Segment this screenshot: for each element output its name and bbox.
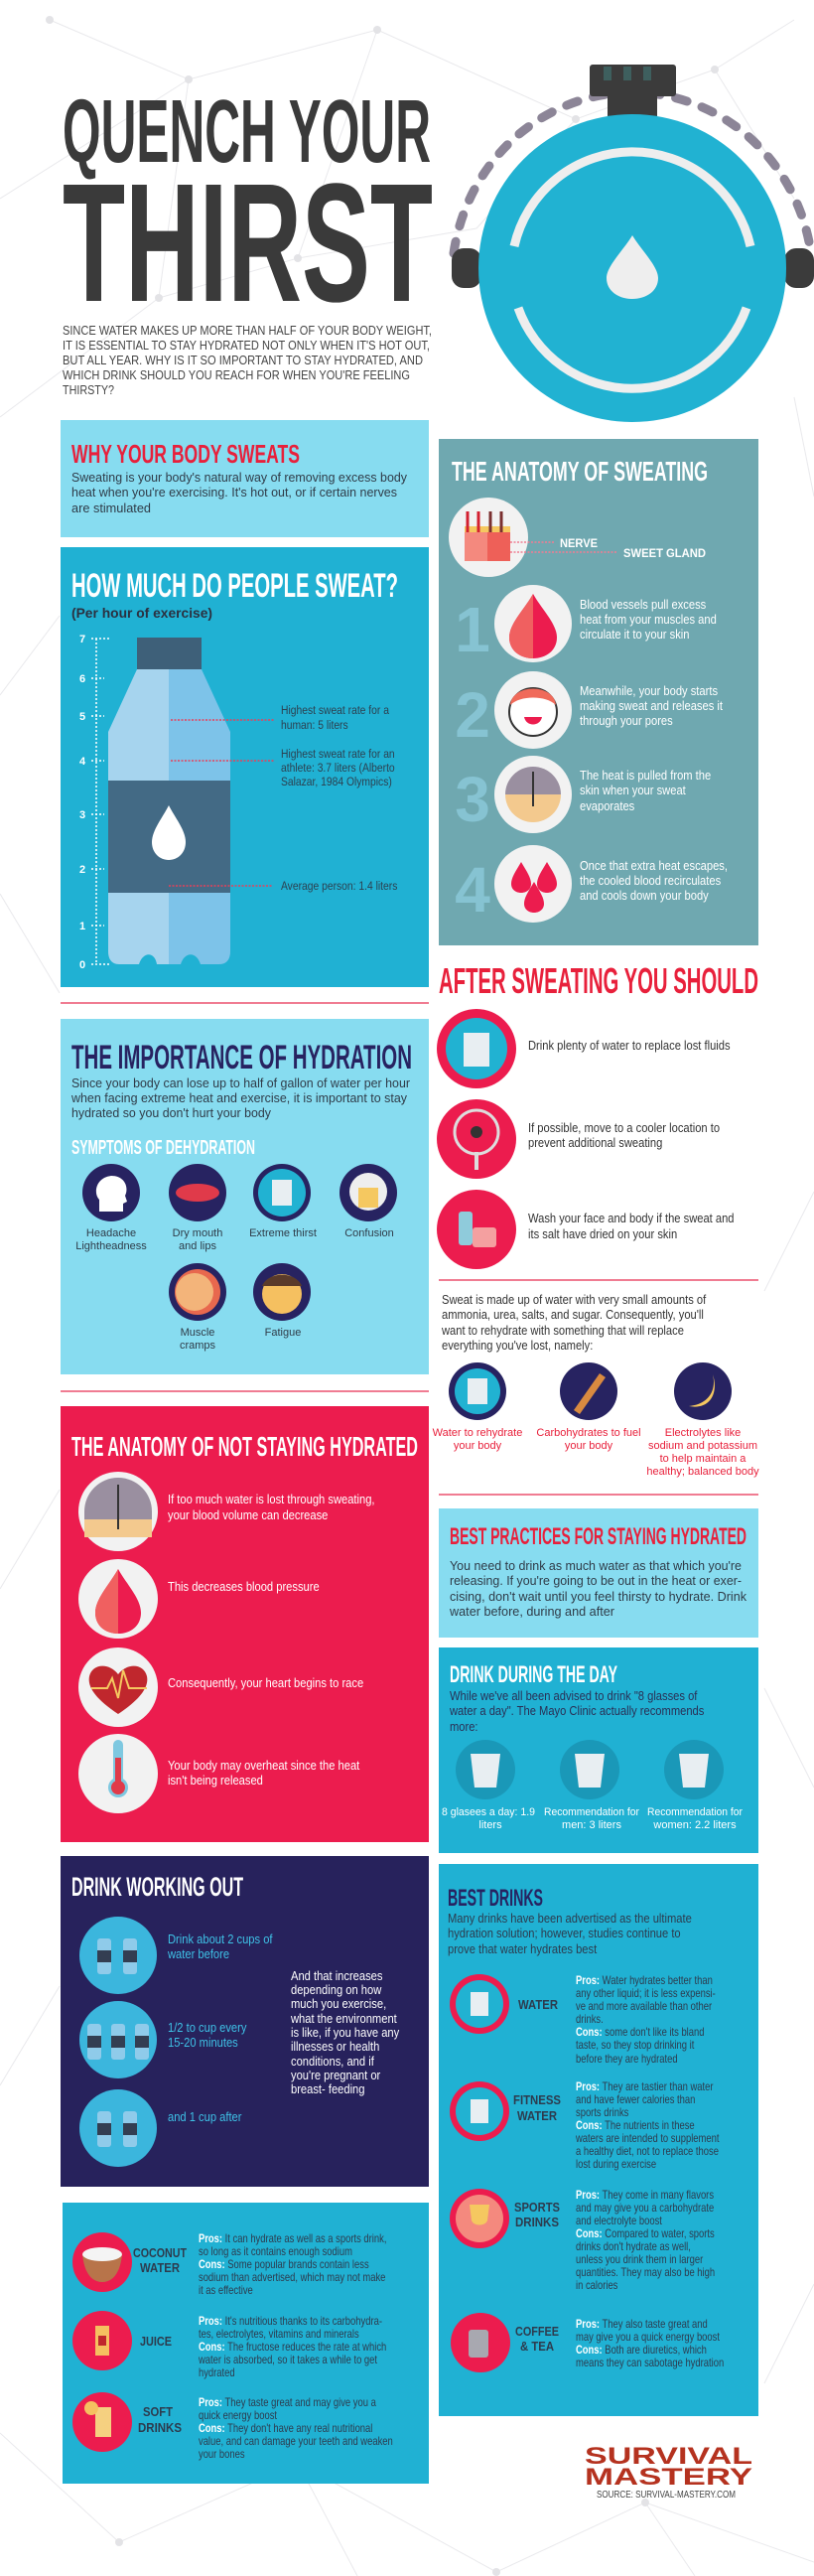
panel: anatomy of sweating: 1 xyxy=(455,594,490,665)
after sweating items: Wash your face and body if the sweat and xyxy=(528,1211,735,1225)
panel: importance of hydration: and lips xyxy=(179,1240,216,1252)
after sweating items: Drink plenty of water to replace lost fluids xyxy=(528,1038,731,1053)
panel: other drinks xyxy=(63,2203,429,2484)
after sweating items: its salt have dried on your skin xyxy=(528,1226,677,1241)
panel: anatomy of sweating: 2 xyxy=(455,679,490,751)
panel: drink working out: much you exercise, xyxy=(291,1996,386,2011)
annotations: Salazar, 1984 Olympics) xyxy=(281,776,392,788)
panel: best drinks: drinks don't hydrate as well, xyxy=(576,2240,691,2253)
panel: anatomy of sweating: through your pores xyxy=(580,713,673,728)
panel: best drinks: prove that water hydrates best xyxy=(448,1941,598,1956)
panel: best drinks: Cons: The nutrients in these xyxy=(576,2119,695,2132)
panel: anatomy of not staying hydrated: Your body may overheat since the heat xyxy=(168,1758,360,1773)
panel: best practices: You need to drink as much water as that which you're xyxy=(450,1558,742,1573)
icons: replace xyxy=(433,1362,759,1478)
panel: other drinks: quick energy boost xyxy=(199,2409,277,2422)
icons: replace: to help maintain a xyxy=(660,1453,746,1465)
panel: anatomy of not staying hydrated: Consequently, your heart begins to race xyxy=(168,1675,363,1690)
icons: replace: your body xyxy=(454,1440,502,1452)
panel: anatomy of sweating: The heat is pulled from the xyxy=(580,768,711,783)
panel: best drinks: & TEA xyxy=(520,2339,555,2354)
panel: drink working out: breast- feeding xyxy=(291,2081,364,2096)
annotations: Highest sweat rate for an xyxy=(281,748,395,761)
panel: importance of hydration: THE IMPORTANCE OF HYDRATION xyxy=(71,1039,412,1076)
intro text: SINCE WATER MAKES UP MORE THAN HALF OF YOUR BODY WEIGHT, xyxy=(63,323,432,338)
panel: importance of hydration: Since your body can lose up to half of gallon of water per hour xyxy=(71,1075,411,1090)
panel: anatomy of sweating: heat from your muscles and xyxy=(580,612,717,627)
panel: other drinks: SOFT xyxy=(143,2404,173,2419)
panel: anatomy of sweating: Meanwhile, your body starts xyxy=(580,683,718,698)
panel: anatomy of sweating: circulate it to your skin xyxy=(580,627,689,642)
text: sweat composition: Sweat is made up of water with very small amounts of xyxy=(442,1292,707,1307)
chart axis: 7 xyxy=(79,634,85,645)
panel: drink working out: what the environment xyxy=(290,2011,397,2026)
panel: anatomy of sweating: Once that extra heat escapes, xyxy=(580,858,728,873)
panel: drink working out: Drink about 2 cups of xyxy=(168,1932,273,1946)
panel: other drinks: JUICE xyxy=(140,2334,172,2349)
panel: drink during the day: liters xyxy=(478,1819,502,1831)
panel: best practices: releasing. If you're going to be out in the heat or exer- xyxy=(450,1573,742,1588)
panel: why your body sweats: heat when you're exercising. It's hot out, or if certain nerves xyxy=(71,485,397,500)
panel: other drinks: hydrated xyxy=(199,2366,235,2379)
panel: anatomy of sweating: and cools down your body xyxy=(580,888,710,903)
intro text: BUT ALL YEAR. WHY IS IT SO IMPORTANT TO STAY HYDRATED, AND xyxy=(63,353,423,367)
panel: best drinks: before they are hydrated xyxy=(576,2053,678,2066)
panel: anatomy of sweating: the cooled blood recirculates xyxy=(580,873,721,888)
panel: drink during the day: While we've all been advised to drink "8 glasses of xyxy=(450,1688,698,1703)
panel: best drinks: quantities. They may also be high xyxy=(576,2266,715,2279)
panel: drink during the day: Recommendation for xyxy=(647,1806,743,1818)
panel: other drinks: it as effective xyxy=(199,2284,253,2297)
panel: best drinks: SPORTS xyxy=(514,2200,560,2215)
panel: best drinks: Many drinks have been advertised as the ultimate xyxy=(448,1911,692,1926)
chart axis: 5 xyxy=(79,711,85,723)
after sweating items: prevent additional sweating xyxy=(528,1135,662,1150)
panel: best drinks: ve and more available than other xyxy=(576,2000,713,2013)
title: THIRST xyxy=(63,149,433,338)
panel: importance of hydration: SYMPTOMS OF DEHYDRATION xyxy=(71,1137,255,1159)
chart axis: 1 xyxy=(79,921,85,932)
panel: best drinks: waters are intended to supplement xyxy=(575,2132,720,2145)
panel: how much do people sweat: (Per hour of exercise) xyxy=(71,605,212,621)
panel: best drinks: hydration solution; however, studies continue to xyxy=(448,1926,681,1940)
panel: best drinks: and may give you a carbohydrate xyxy=(576,2202,714,2215)
panel: anatomy of sweating: making sweat and releases it xyxy=(580,698,724,713)
panel: anatomy of not staying hydrated: isn't being released xyxy=(168,1773,263,1788)
panel: best drinks: WATER xyxy=(518,1997,559,2012)
logo: survival mastery: SURVIVAL xyxy=(585,2443,752,2470)
logo: survival mastery: MASTERY xyxy=(585,2464,752,2491)
panel: anatomy of not staying hydrated: If too much water is lost through sweating, xyxy=(168,1492,375,1506)
panel: why your body sweats: Sweating is your body's natural way of removing excess body xyxy=(71,470,407,485)
panel: drink during the day: water a day". The Mayo Clinic actually recommends xyxy=(449,1703,704,1718)
panel: drink during the day: women: 2.2 liters xyxy=(652,1819,737,1831)
panel: importance of hydration: cramps xyxy=(180,1340,216,1352)
annotations: athlete: 3.7 liters (Alberto xyxy=(281,762,395,775)
panel: best drinks: and electrolyte boost xyxy=(576,2215,662,2227)
panel: drink during the day: DRINK DURING THE DAY xyxy=(450,1661,617,1688)
panel: other drinks: Cons: Some popular brands contain less xyxy=(199,2258,369,2271)
chart axis: 0 xyxy=(79,959,85,971)
panel: other drinks: water is absorbed, so it takes a while to get xyxy=(198,2354,377,2366)
panel: importance of hydration xyxy=(61,1019,429,1374)
panel: best drinks: DRINKS xyxy=(515,2215,559,2229)
panel: best drinks: and have fewer calories than xyxy=(576,2093,696,2106)
intro text: THIRSTY? xyxy=(63,382,114,397)
panel: drink working out: you're pregnant or xyxy=(291,2068,380,2082)
icons: replace: your body xyxy=(565,1440,613,1452)
panel: best drinks: means they can sabotage hydration xyxy=(576,2357,724,2369)
panel: best practices xyxy=(439,1508,758,1638)
panel: drink working out: conditions, and if xyxy=(291,2054,374,2069)
panel: best drinks: in calories xyxy=(576,2279,617,2292)
panel: drink during the day: Recommendation for xyxy=(544,1806,639,1818)
panel: drink working out: is like, if you have any xyxy=(291,2025,400,2040)
panel: best drinks: lost during exercise xyxy=(576,2158,656,2171)
panel: other drinks: value, and can damage your teeth and weaken xyxy=(199,2435,393,2448)
icons: replace: Water to rehydrate xyxy=(433,1427,522,1439)
panel: anatomy of sweating: SWEET GLAND xyxy=(623,546,706,560)
panel: importance of hydration: Muscle xyxy=(181,1327,214,1339)
intro text: WHICH DRINK SHOULD YOU REACH FOR WHEN YOU'RE FEELING xyxy=(63,367,410,382)
panel: best drinks: Pros: They also taste great and xyxy=(576,2318,708,2331)
panel: how much do people sweat: HOW MUCH DO PEOPLE SWEAT? xyxy=(71,567,398,605)
panel: why your body sweats: WHY YOUR BODY SWEATS xyxy=(71,439,300,469)
panel: best practices: cising, don't wait until you feel thirsty to hydrate. Drink xyxy=(450,1589,746,1604)
panel: best drinks: BEST DRINKS xyxy=(448,1885,543,1912)
panel: anatomy of not staying hydrated: This decreases blood pressure xyxy=(168,1579,320,1594)
panel: other drinks: Pros: They taste great and may give you a xyxy=(199,2396,376,2409)
chart axis: 6 xyxy=(79,673,85,685)
panel: best drinks: may give you a quick energy boost xyxy=(576,2331,720,2344)
text: sweat composition: everything you've lost, namely: xyxy=(442,1338,593,1353)
panel: why your body sweats xyxy=(61,420,429,537)
panel: best drinks: FITNESS xyxy=(513,2092,561,2107)
annotations: Highest sweat rate for a xyxy=(281,704,390,717)
icon: stopwatch xyxy=(452,65,814,422)
panel: anatomy of sweating: Blood vessels pull excess xyxy=(580,597,706,612)
panel: best drinks: any other liquid; it is less expensi- xyxy=(576,1987,716,2000)
panel: best drinks: sports drinks xyxy=(576,2106,628,2119)
panel: other drinks: so long as it contains enough sodium xyxy=(199,2245,352,2258)
panel: drink working out: And that increases xyxy=(291,1968,383,1983)
text: sweat composition xyxy=(441,1292,707,1353)
panel: anatomy of sweating: 4 xyxy=(455,854,490,926)
panel: other drinks: Pros: It can hydrate as well as a sports drink, xyxy=(199,2232,386,2245)
after sweating items: If possible, move to a cooler location to xyxy=(528,1120,720,1135)
panel: best drinks: taste, so they stop drinking it xyxy=(576,2039,694,2052)
title xyxy=(63,82,433,338)
panel: other drinks: WATER xyxy=(140,2260,181,2275)
panel: drink working out: DRINK WORKING OUT xyxy=(71,1872,243,1902)
panel: best practices: water before, during and after xyxy=(449,1604,615,1619)
panel: drink working out: and 1 cup after xyxy=(168,2109,242,2124)
panel: anatomy of sweating: skin when your sweat xyxy=(580,783,686,797)
panel: best drinks: Cons: Both are diuretics, which xyxy=(576,2344,707,2357)
panel: best drinks: Pros: Water hydrates better than xyxy=(576,1974,713,1987)
after sweating items xyxy=(437,1009,735,1269)
icons: replace: sodium and potassium xyxy=(648,1440,757,1452)
panel: importance of hydration: when facing extreme heat and exercise, it is important to stay xyxy=(70,1090,407,1105)
icons: replace: healthy; balanced body xyxy=(646,1466,759,1478)
panel: drink working out: illnesses or health xyxy=(291,2039,379,2054)
panel: anatomy of not staying hydrated: THE ANATOMY OF NOT STAYING HYDRATED xyxy=(71,1431,418,1462)
intro text xyxy=(63,323,432,397)
text: sweat composition: ammonia, urea, salts, and sugar. Consequently, you'll xyxy=(442,1307,704,1322)
panel: best drinks: unless you drink them in larger xyxy=(576,2253,704,2266)
panel: drink working out: depending on how xyxy=(291,1982,382,1997)
panel: best drinks xyxy=(439,1864,758,2416)
logo: survival mastery xyxy=(585,2443,752,2501)
panel: best drinks: Cons: some don't like its bland xyxy=(576,2026,705,2039)
panel: other drinks: sodium than advertised, which may not make xyxy=(199,2271,386,2284)
chart axis xyxy=(79,634,111,971)
panel: anatomy of sweating: NERVE xyxy=(560,536,598,550)
panel: why your body sweats: are stimulated xyxy=(71,501,151,515)
intro text: IT IS ESSENTIAL TO STAY HYDRATED NOT ONLY WHEN IT'S HOT OUT, xyxy=(63,338,430,353)
panel: other drinks: your bones xyxy=(199,2448,245,2461)
panel: importance of hydration: Fatigue xyxy=(265,1327,301,1339)
panel: importance of hydration: Lightheadness xyxy=(75,1240,147,1252)
panel: drink during the day: more: xyxy=(450,1719,478,1734)
panel: importance of hydration: hydrated so you don't hurt your body xyxy=(71,1105,271,1120)
symptoms icons xyxy=(82,1164,397,1321)
icons: replace: Electrolytes like xyxy=(665,1427,741,1439)
text: sweat composition: want to rehydrate with something that will replace xyxy=(441,1323,684,1338)
panel: best drinks: COFFEE xyxy=(515,2324,559,2339)
panel: anatomy of sweating: 3 xyxy=(455,764,490,835)
panel: anatomy of sweating: evaporates xyxy=(580,798,634,813)
panel: other drinks: COCONUT xyxy=(133,2245,187,2260)
panel: best drinks: Cons: Compared to water, sports xyxy=(576,2227,715,2240)
chart axis: 3 xyxy=(79,809,85,821)
chart axis: 4 xyxy=(79,756,86,768)
panel: best drinks: Pros: They come in many flavors xyxy=(576,2189,714,2202)
panel: anatomy of not staying hydrated xyxy=(61,1406,429,1842)
logo: survival mastery: SOURCE: SURVIVAL-MASTERY.COM xyxy=(597,2490,736,2501)
panel: anatomy of sweating xyxy=(439,439,758,945)
panel: drink working out: 1/2 to cup every xyxy=(168,2020,247,2035)
panel: other drinks: Cons: The fructose reduces the rate at which xyxy=(199,2341,386,2354)
panel: drink working out: 15-20 minutes xyxy=(168,2035,238,2050)
annotations xyxy=(169,704,398,893)
panel: other drinks: Cons: They don't have any real nutritional xyxy=(199,2422,372,2435)
icons: replace: Carbohydrates to fuel xyxy=(536,1427,641,1439)
panel: importance of hydration: Headache xyxy=(86,1227,136,1239)
panel: other drinks: DRINKS xyxy=(138,2420,182,2435)
panel: drink working out xyxy=(61,1856,429,2187)
icon: bottle xyxy=(108,638,230,964)
panel: importance of hydration: Extreme thirst xyxy=(249,1227,317,1239)
panel: anatomy of not staying hydrated: your blood volume can decrease xyxy=(168,1507,329,1522)
panel: importance of hydration: Confusion xyxy=(344,1227,394,1239)
chart axis: 2 xyxy=(79,864,85,876)
panel: importance of hydration: Dry mouth xyxy=(173,1227,222,1239)
panel: how much do people sweat xyxy=(61,547,429,987)
annotations: human: 5 liters xyxy=(281,719,348,732)
panel: best drinks: Pros: They are tastier than water xyxy=(576,2080,714,2093)
panel: other drinks: Pros: It's nutritious thanks to its carbohydra- xyxy=(199,2315,382,2328)
annotations: Average person: 1.4 liters xyxy=(281,880,398,893)
panel: best drinks: drinks. xyxy=(576,2013,604,2026)
panel: drink during the day: 8 glasees a day: 1.9 xyxy=(442,1806,535,1818)
panel: other drinks: tes, electrolytes, vitamins and minerals xyxy=(199,2328,359,2341)
title: QUENCH YOUR xyxy=(63,82,431,182)
panel: best drinks: a healthy diet, not to replace those xyxy=(576,2145,719,2158)
panel: drink during the day xyxy=(439,1647,758,1853)
panel: best drinks: WATER xyxy=(517,2108,558,2123)
panel: drink during the day: men: 3 liters xyxy=(562,1819,621,1831)
panel: drink working out: water before xyxy=(167,1946,229,1961)
